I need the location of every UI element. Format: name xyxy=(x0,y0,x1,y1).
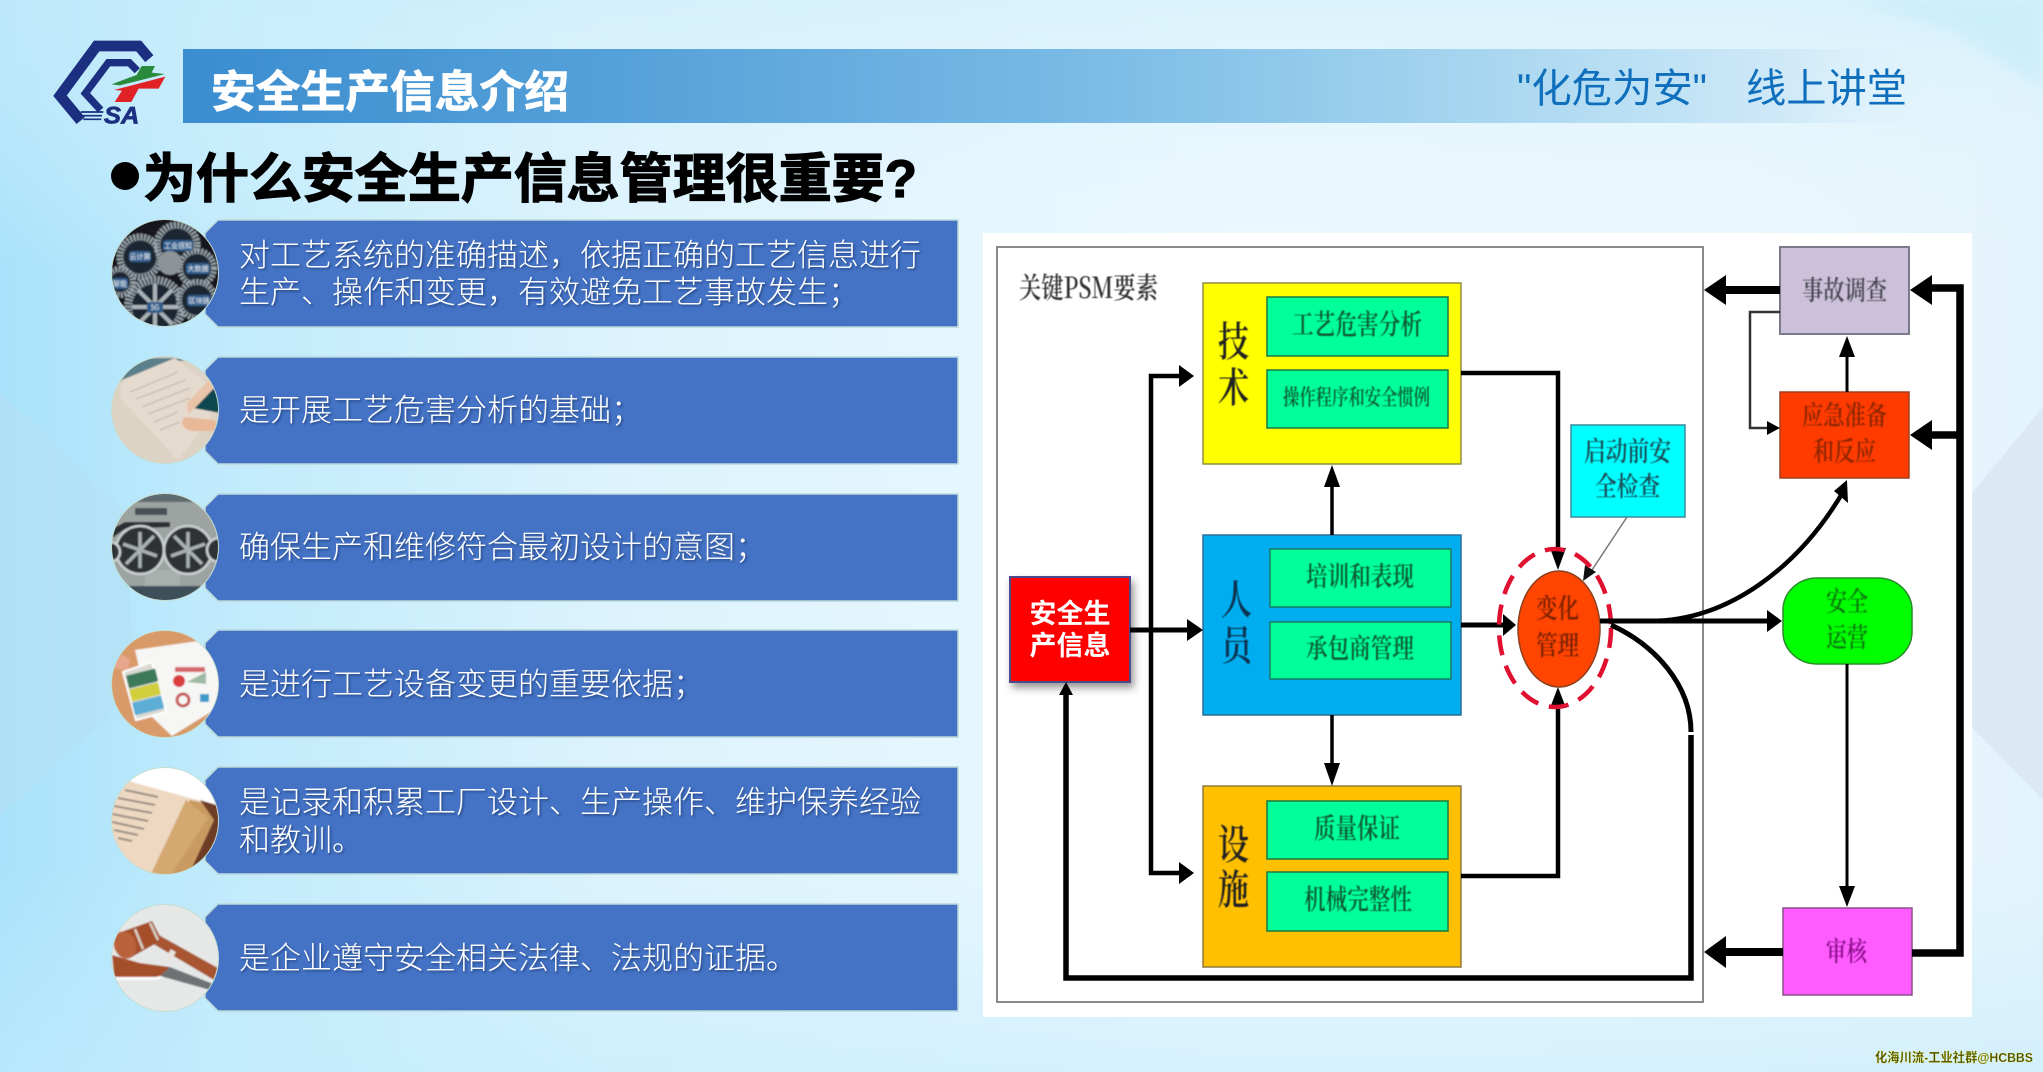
PSM frame xyxy=(997,247,1703,1002)
box: facilities xyxy=(1203,786,1461,967)
arrow: curve to emergency response xyxy=(1650,480,1848,621)
panel: reason 1 xyxy=(205,220,958,327)
panel: PSM diagram xyxy=(983,233,1972,1017)
icon: industrial fans photo xyxy=(111,493,219,601)
box: technology: 工艺危害分析 xyxy=(1292,303,1422,343)
arrow: feedback loop to information xyxy=(1059,625,1691,978)
arrow: change management to safe operations xyxy=(1600,610,1782,632)
icon: charts on table photo xyxy=(110,629,222,739)
box: emergency response xyxy=(1780,392,1909,478)
box: technology: 术 xyxy=(1218,355,1249,414)
box: incident investigation: 事故调查 xyxy=(1802,269,1887,308)
arrow: investigation bracket to emergency xyxy=(1750,312,1780,435)
text: reason 5: 是记录和积累工厂设计、生产操作、维护保养经验 xyxy=(239,777,921,822)
box: pre-startup safety review: 全检查 xyxy=(1595,465,1660,504)
box: safe operations xyxy=(1783,578,1912,664)
box: process safety information: 安全生 xyxy=(1030,592,1110,631)
icon: gears photo: 大数据 xyxy=(188,264,208,274)
box: facilities: 质量保证 xyxy=(1314,807,1400,847)
panel: reason 5 xyxy=(205,767,958,874)
box: emergency response: 应急准备 xyxy=(1802,394,1887,433)
panel: reason 4 xyxy=(205,630,958,737)
header title: 安全生产信息介绍 xyxy=(211,56,569,120)
text: reason 2: 是开展工艺危害分析的基础； xyxy=(239,385,642,430)
node: change management xyxy=(1518,571,1600,687)
text: reason 1: 生产、操作和变更，有效避免工艺事故发生； xyxy=(239,267,859,312)
box: audit xyxy=(1783,908,1912,995)
box: technology: 技 xyxy=(1218,309,1249,368)
icon: writing on paper photo xyxy=(110,355,222,465)
header right text xyxy=(1517,56,1907,114)
box: facilities: 施 xyxy=(1218,857,1249,916)
text: reason 6: 是企业遵守安全相关法律、法规的证据。 xyxy=(239,933,797,978)
arrow: review to change management xyxy=(1583,517,1627,581)
icon: gavel photo xyxy=(110,903,220,1013)
box: process safety information: 产信息 xyxy=(1030,624,1110,663)
box: facilities: 机械完整性 xyxy=(1304,878,1412,918)
box: people xyxy=(1203,535,1461,715)
icon: CSA logo xyxy=(60,46,165,129)
watermark: 化海川流-工业社群@HCBBS xyxy=(1875,1050,2033,1065)
icon: gears photo: 工业感知 xyxy=(164,241,192,251)
panel: reason 6 xyxy=(205,904,958,1011)
icon: gears photo: 5G xyxy=(151,303,160,313)
node: change management: 管理 xyxy=(1536,624,1579,663)
header bar xyxy=(183,49,1963,123)
box: people: 培训和表现 xyxy=(1306,555,1414,594)
icon: gears photo xyxy=(111,219,219,327)
box: emergency response: 和反应 xyxy=(1813,430,1876,469)
box: safe operations: 安全 xyxy=(1826,580,1868,619)
text: reason 4: 是进行工艺设备变更的重要依据； xyxy=(239,659,704,704)
text: reason 1 xyxy=(239,230,921,312)
arrow: audit loop to investigation and emergency xyxy=(1910,275,1960,953)
box: people: 人 xyxy=(1221,567,1252,626)
text: reason 5: 和教训。 xyxy=(239,815,363,860)
panel: reason 2 xyxy=(205,357,958,464)
icon: open book photo xyxy=(110,766,220,876)
box: safe operations: 运营 xyxy=(1826,616,1868,655)
arrow: people to change management xyxy=(1461,614,1516,636)
box: process safety information xyxy=(1010,577,1130,682)
icon: gears photo: 智能 xyxy=(113,279,127,289)
box: audit: 审核 xyxy=(1826,930,1869,969)
header right text: 线上讲堂 xyxy=(1746,56,1907,114)
icon: gears photo: 区块链 xyxy=(188,296,210,306)
box: people: 员 xyxy=(1221,613,1256,672)
text: reason 1: 对工艺系统的准确描述，依据正确的工艺信息进行 xyxy=(239,230,921,275)
arrow: technology to change management xyxy=(1461,373,1566,570)
arrow: incident investigation to frame xyxy=(1704,275,1780,305)
box: facilities: 设 xyxy=(1218,812,1249,871)
arrow: facilities to change management xyxy=(1461,687,1566,876)
arrow: emergency to investigation xyxy=(1839,336,1855,392)
box: pre-startup safety review xyxy=(1571,425,1685,517)
box: technology xyxy=(1203,283,1461,464)
box: people: 承包商管理 xyxy=(1306,627,1414,666)
node: change management: 变化 xyxy=(1536,587,1579,626)
arrow: people to technology xyxy=(1324,465,1340,535)
icon: gears photo: 云计算 xyxy=(130,252,150,262)
text: reason 3: 确保生产和维修符合最初设计的意图； xyxy=(239,522,766,567)
main heading: 为什么安全生产信息管理很重要? xyxy=(143,150,917,209)
arrow: information to people xyxy=(1130,619,1203,641)
panel: reason 3 xyxy=(205,494,958,601)
arrow: people to facilities xyxy=(1324,715,1340,786)
arrow: safe operations to audit xyxy=(1839,664,1855,907)
box: technology: 操作程序和安全惯例 xyxy=(1283,381,1430,412)
arrow: feed lines to technology and facilities xyxy=(1151,365,1194,884)
header right text: "化危为安" xyxy=(1517,67,1707,111)
text: reason 5 xyxy=(239,777,921,860)
arrow: audit to frame xyxy=(1704,936,1783,968)
dashed ring: change management xyxy=(1499,549,1611,707)
diagram title: 关键PSM要素 xyxy=(1019,266,1158,307)
box: incident investigation xyxy=(1780,247,1909,334)
icon: CSA logo: SA xyxy=(104,102,139,129)
box: pre-startup safety review: 启动前安 xyxy=(1584,430,1672,469)
